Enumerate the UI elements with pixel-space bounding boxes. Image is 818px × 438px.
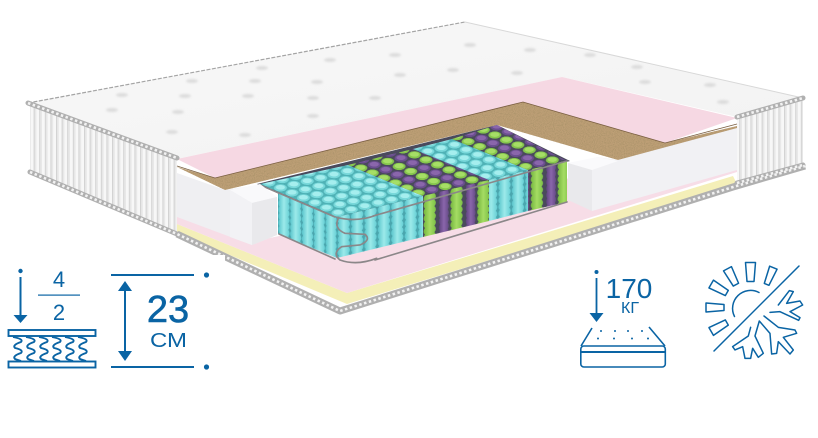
load indicator 170 кг bbox=[581, 270, 665, 367]
icon: sun bbox=[706, 262, 777, 335]
left side panel with stripes bbox=[30, 105, 177, 234]
spring unit bbox=[257, 125, 570, 263]
icon: load arrow bbox=[590, 270, 604, 322]
icon: mattress springs bbox=[8, 330, 96, 368]
mattress illustration bbox=[28, 22, 805, 311]
right side panel with stripes bbox=[737, 98, 803, 183]
coir layer bbox=[177, 102, 737, 190]
load unit: КГ bbox=[621, 300, 639, 317]
right white foam block bbox=[568, 128, 737, 211]
icon: mattress bbox=[581, 327, 665, 367]
pink layer bottom edge bbox=[177, 102, 737, 178]
piping trims bbox=[28, 98, 805, 311]
double arrow bbox=[118, 281, 132, 361]
quilted top surface bbox=[28, 22, 803, 159]
steel wire frame and corner coil bbox=[260, 161, 567, 263]
white backing behind icons bbox=[0, 255, 225, 438]
lower pink foam layer bbox=[177, 150, 737, 293]
diagonal divider bbox=[714, 266, 799, 351]
lower yellow layer bbox=[177, 176, 737, 304]
icon: snowflake bbox=[733, 291, 803, 358]
top pink foam layer bbox=[177, 77, 737, 178]
shadow behind springs bbox=[257, 125, 570, 220]
fraction 4/2: 4 bbox=[53, 267, 65, 292]
fraction 4/2: 2 bbox=[53, 300, 65, 325]
height unit: СМ bbox=[150, 330, 187, 352]
icon: spring block 4/2 bbox=[8, 267, 96, 368]
height indicator 23 см bbox=[111, 272, 209, 370]
spring side faces bbox=[278, 161, 567, 258]
fraction 4/2 bbox=[38, 267, 80, 325]
spring tops bbox=[260, 125, 567, 217]
height lines and dots bbox=[111, 272, 209, 370]
left white foam block bbox=[177, 173, 277, 245]
icon: summer and winter sides bbox=[706, 262, 803, 358]
height value: 23 bbox=[147, 289, 189, 331]
load value: 170 bbox=[606, 273, 652, 304]
icon: down arrow bbox=[14, 269, 28, 323]
